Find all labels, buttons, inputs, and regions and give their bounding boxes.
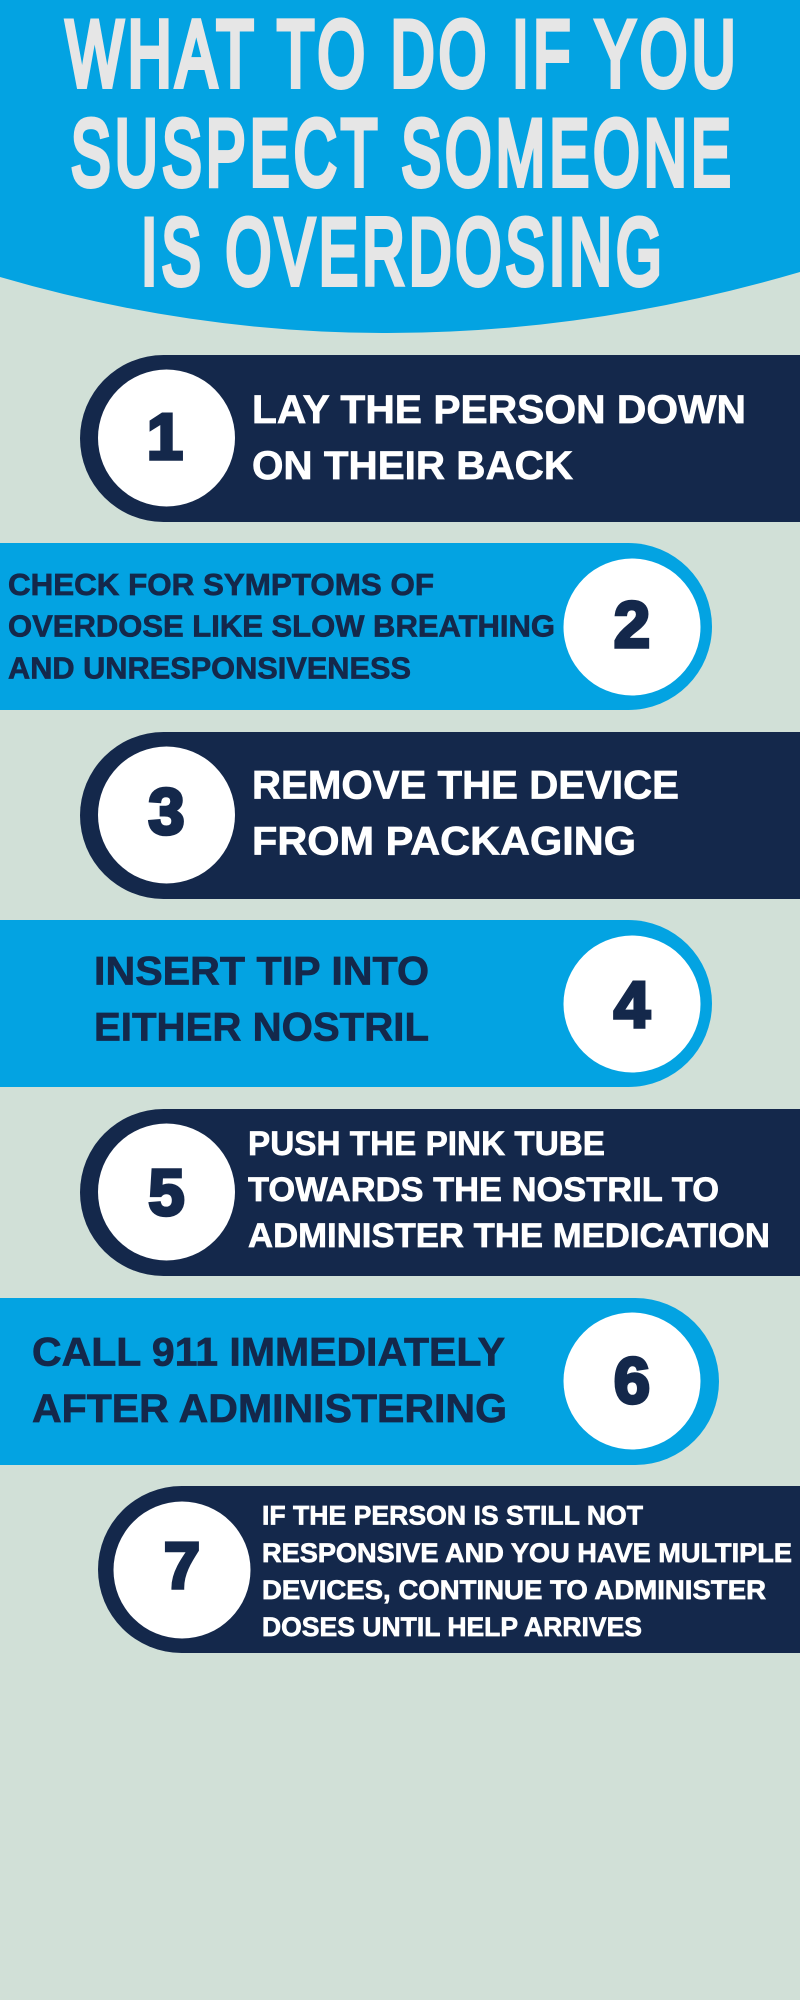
panel: step 2: OVERDOSE LIKE SLOW BREATHING — [8, 608, 555, 644]
panel: step 1: 1 — [147, 400, 183, 473]
panel: step 4: 4 — [614, 968, 650, 1041]
panel: step 3: 3 — [148, 775, 185, 848]
panel: step 2 — [0, 543, 712, 710]
panel: step 4 — [0, 920, 712, 1087]
panel: step 7 — [98, 1486, 800, 1653]
panel: step 6: CALL 911 IMMEDIATELY — [32, 1330, 505, 1374]
panel: step 4: EITHER NOSTRIL — [94, 1006, 429, 1050]
panel: step 4: INSERT TIP INTO — [94, 950, 429, 994]
panel: step 3 — [80, 732, 800, 899]
panel: step 7: DOSES UNTIL HELP ARRIVES — [262, 1612, 642, 1642]
panel: step 1: ON THEIR BACK — [252, 444, 573, 488]
panel: step 6 — [0, 1298, 719, 1465]
panel: step 2: AND UNRESPONSIVENESS — [8, 650, 411, 686]
panel: step 1: LAY THE PERSON DOWN — [252, 388, 746, 432]
panel: step 1 — [80, 355, 800, 522]
panel: step 5: TOWARDS THE NOSTRIL TO — [248, 1171, 719, 1209]
panel: step 2: CHECK FOR SYMPTOMS OF — [8, 567, 434, 602]
panel: step 5: PUSH THE PINK TUBE — [248, 1125, 605, 1163]
panel: step 7: RESPONSIVE AND YOU HAVE MULTIPLE — [262, 1538, 792, 1568]
panel: step 7: DEVICES, CONTINUE TO ADMINISTER — [262, 1575, 766, 1605]
title banner — [0, 0, 800, 333]
panel: step 6: 6 — [614, 1344, 650, 1417]
panel: step 2: 2 — [614, 588, 650, 661]
panel: step 6: AFTER ADMINISTERING — [32, 1387, 507, 1431]
panel: step 3: REMOVE THE DEVICE — [252, 764, 679, 808]
panel: step 7: IF THE PERSON IS STILL NOT — [262, 1500, 643, 1530]
panel: step 5: 5 — [148, 1156, 185, 1229]
panel: step 3: FROM PACKAGING — [252, 820, 636, 864]
panel: step 7: 7 — [164, 1529, 200, 1602]
panel: step 5 — [80, 1109, 800, 1276]
panel: step 5: ADMINISTER THE MEDICATION — [248, 1217, 770, 1255]
title — [66, 1, 740, 304]
